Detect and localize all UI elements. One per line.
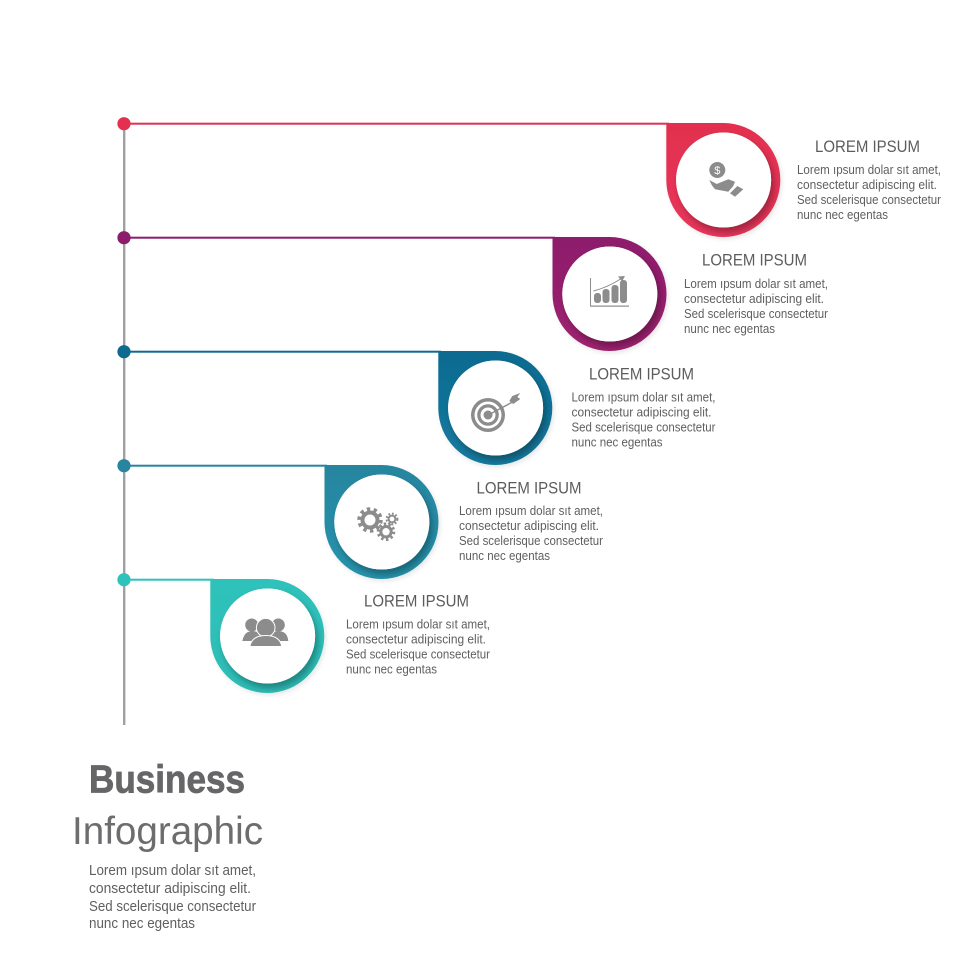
icon: gears (359, 509, 397, 540)
step 1 connector line and node (117, 117, 669, 130)
icon: group of people (242, 618, 288, 646)
step 1 text: Sed scelerisque consectetur (797, 193, 941, 207)
step 3 text: Lorem ıpsum dolar sıt amet, (572, 390, 716, 404)
icon: coin in hand: $ (714, 165, 720, 177)
step 2 badge (552, 237, 666, 351)
step 4 text: nunc nec egentas (459, 549, 550, 563)
step 4 text: Lorem ıpsum dolar sıt amet, (459, 504, 603, 518)
step 1 text: nunc nec egentas (797, 208, 888, 222)
summary text block: Lorem ıpsum dolar sıt amet, (89, 863, 256, 879)
step 5 text: Sed scelerisque consectetur (346, 648, 490, 662)
step 1 text: consectetur adipiscing elit. (797, 178, 937, 192)
step 4 text: Sed scelerisque consectetur (459, 534, 603, 548)
step 4 text: consectetur adipiscing elit. (459, 519, 599, 533)
step 1 badge (666, 123, 780, 237)
step 2 text: Lorem ıpsum dolar sıt amet, (684, 277, 828, 291)
title: Business: Business (89, 758, 245, 802)
step 5 text (346, 592, 490, 676)
step 3 text: nunc nec egentas (572, 436, 662, 450)
summary text block: nunc nec egentas (89, 916, 195, 932)
step 1 text: LOREM IPSUM (815, 138, 920, 156)
step 5 text: Lorem ıpsum dolar sıt amet, (346, 618, 490, 632)
step 5 badge (210, 579, 324, 693)
icon: growth bar chart (590, 276, 629, 307)
step 3 connector line and node (117, 345, 441, 358)
summary text block (89, 863, 256, 932)
icon: target with arrow (471, 393, 520, 432)
title: Infographic: Infographic (72, 810, 263, 853)
step 4 connector line and node (117, 459, 327, 472)
summary text block: consectetur adipiscing elit. (89, 881, 251, 897)
step 1 text (797, 138, 941, 222)
step 3 text: consectetur adipiscing elit. (572, 406, 712, 420)
step 4 text: LOREM IPSUM (476, 480, 582, 498)
step 2 text (684, 252, 828, 336)
step 3 badge (438, 351, 552, 465)
step 3 text: Sed scelerisque consectetur (572, 420, 716, 434)
step 4 text (459, 480, 603, 563)
step 5 text: consectetur adipiscing elit. (346, 632, 486, 646)
step 3 text (572, 366, 716, 450)
step 2 text: Sed scelerisque consectetur (684, 307, 828, 321)
step 5 text: nunc nec egentas (346, 662, 437, 676)
step 1 text: Lorem ıpsum dolar sıt amet, (797, 163, 941, 177)
step 2 connector line and node (117, 231, 555, 244)
step 2 text: nunc nec egentas (684, 322, 775, 336)
step 2 text: consectetur adipiscing elit. (684, 292, 824, 306)
step 5 text: LOREM IPSUM (364, 592, 469, 610)
vertical timeline axis (123, 124, 125, 725)
step 5 connector line and node (117, 573, 214, 586)
step 2 text: LOREM IPSUM (702, 252, 807, 270)
step 4 badge (324, 465, 438, 579)
step 3 text: LOREM IPSUM (589, 366, 694, 384)
summary text block: Sed scelerisque consectetur (89, 899, 256, 915)
